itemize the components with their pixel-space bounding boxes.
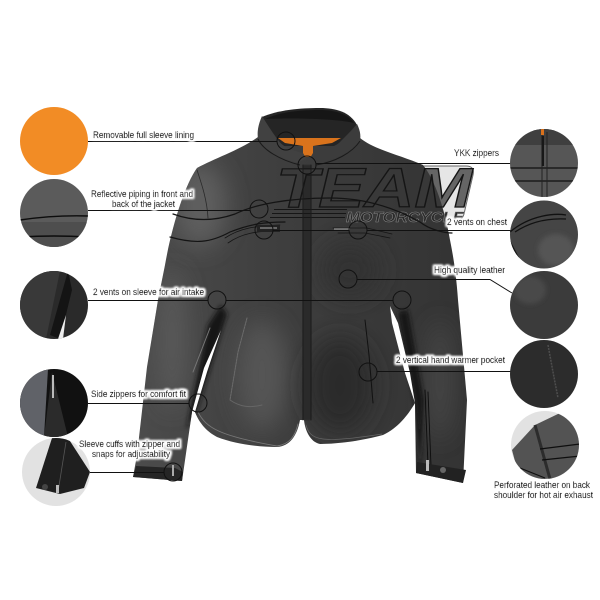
right photo: YKK zippers xyxy=(510,129,578,197)
label: hand warmer: 2 vertical hand warmer pocket xyxy=(396,355,505,365)
jacket shading xyxy=(158,163,452,470)
logo letters on jacket: MOTORCYCLE xyxy=(346,209,465,226)
left photo: orange lining xyxy=(20,107,88,175)
label: sleeve vents: 2 vents on sleeve for air intake xyxy=(93,287,204,297)
labels xyxy=(79,130,593,500)
label: reflective piping line 2: back of the jacket xyxy=(112,199,175,209)
left photo: sleeve cuff xyxy=(22,438,90,506)
label: perforated leather: Perforated leather on back xyxy=(494,480,590,490)
left photo: sleeve vents xyxy=(20,271,88,339)
sleeve gap right xyxy=(390,306,415,403)
label: perforated leather line 2: shoulder for hot air exhaust xyxy=(494,490,593,500)
sleeve gap left xyxy=(192,330,221,412)
logo plate: TEAM Motorcycle background xyxy=(270,166,473,221)
label: chest vents: 2 vents on chest xyxy=(447,217,507,227)
jacket photo xyxy=(133,108,474,483)
jacket silhouette xyxy=(133,137,467,483)
piping and seams xyxy=(170,165,452,466)
cuff hardware xyxy=(133,460,466,483)
vents on jacket xyxy=(257,225,350,232)
right photo: perforated shoulder xyxy=(511,411,580,480)
label: sleeve lining: Removable full sleeve lining xyxy=(93,130,194,140)
left photo: side zippers xyxy=(20,369,88,437)
label: cuffs: Sleeve cuffs with zipper and xyxy=(79,439,180,449)
right photo: chest vent xyxy=(510,200,578,269)
callout markers and leader lines xyxy=(88,132,512,481)
right photo: hand warmer pocket xyxy=(510,340,578,408)
label: YKK zippers: YKK zippers xyxy=(454,148,499,158)
label: reflective piping: Reflective piping in front and xyxy=(91,189,193,199)
collar xyxy=(258,108,360,165)
label: cuffs line 2: snaps for adjustability xyxy=(92,449,170,459)
logo letters on jacket: TEAM xyxy=(276,156,474,219)
right photo: quality leather xyxy=(510,271,578,339)
label: quality leather: High quality leather xyxy=(434,265,505,275)
label: side zippers: Side zippers for comfort fit xyxy=(91,389,186,399)
left photo: reflective piping xyxy=(20,179,88,247)
